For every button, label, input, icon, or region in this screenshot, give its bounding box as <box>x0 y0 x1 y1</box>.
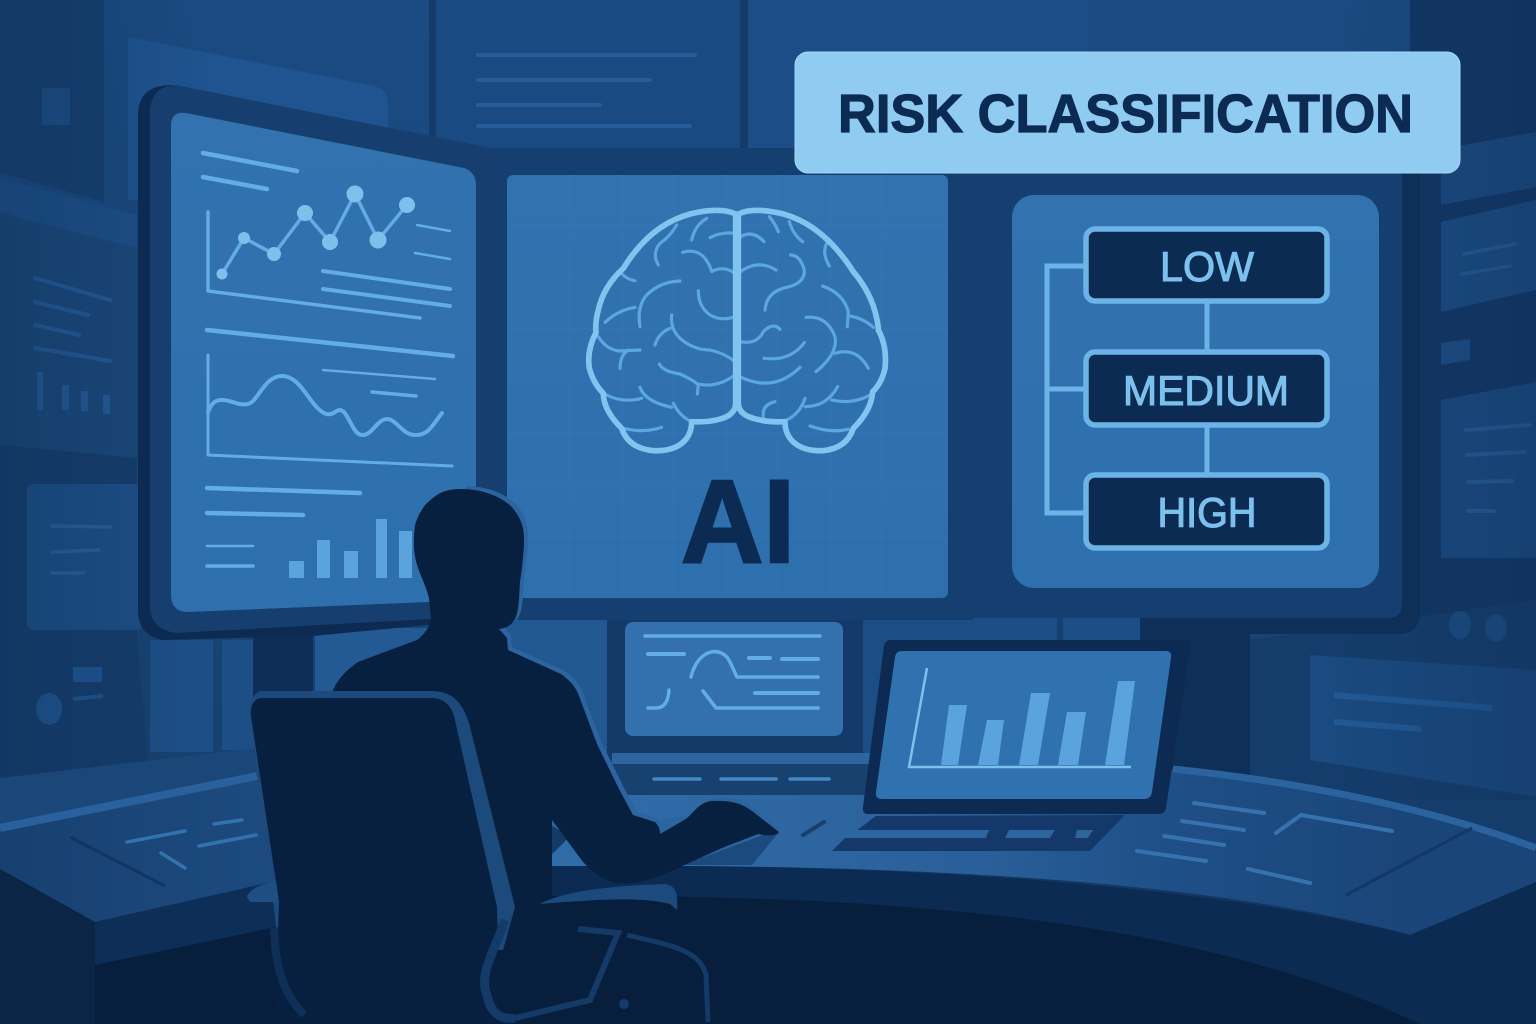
background panels: top wall <box>128 0 1088 200</box>
title banner <box>795 52 1460 173</box>
risk level: MEDIUM: MEDIUM <box>1123 367 1289 414</box>
panel: left monitor frame <box>138 85 500 640</box>
chart: small bar chart <box>289 519 412 578</box>
panel: classification screen <box>1012 195 1379 588</box>
icon: brain <box>589 210 885 451</box>
chart: wave line chart <box>208 355 452 466</box>
desk: left section <box>0 748 300 1024</box>
panel: right monitor bezel <box>960 150 1402 618</box>
laptop <box>832 640 1190 851</box>
text placeholder lines: chart notes <box>207 225 453 356</box>
text placeholder lines: footer <box>207 488 360 566</box>
panel: right monitor frame <box>1140 150 1420 634</box>
chair <box>247 691 708 1024</box>
panel: central AI screen <box>507 175 948 598</box>
risk level: LOW <box>1086 229 1327 301</box>
chart: line chart with points <box>208 186 420 318</box>
title banner: RISK CLASSIFICATION <box>838 84 1413 144</box>
risk level: LOW: LOW <box>1160 243 1254 290</box>
text placeholder lines: header <box>203 153 297 189</box>
hand shadow on desk <box>674 832 779 865</box>
risk level: MEDIUM <box>1086 352 1327 425</box>
risk level: HIGH <box>1086 475 1327 548</box>
background panels: right wall <box>1250 0 1536 850</box>
background panels: left wall <box>0 0 255 790</box>
desk: centre and right section <box>480 753 1536 1024</box>
panel: left analytics screen <box>171 113 476 612</box>
monitor stands and lower wall <box>253 600 1250 775</box>
person silhouette: rim light <box>454 486 779 857</box>
panel: small centre monitor <box>625 622 843 736</box>
chart: laptop bar chart <box>909 668 1135 767</box>
diagram: connectors between risk levels <box>1047 266 1207 513</box>
side shading <box>0 0 1536 800</box>
panel: central monitor frame <box>470 148 973 620</box>
person silhouette <box>300 489 779 950</box>
risk level: HIGH: HIGH <box>1158 489 1256 536</box>
label: AI: AI <box>681 456 795 588</box>
